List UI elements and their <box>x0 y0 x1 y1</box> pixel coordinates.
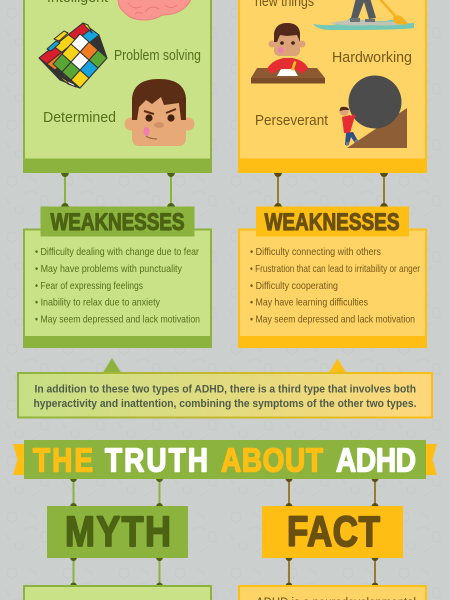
icon: boy at desk <box>251 23 325 84</box>
label: Perseverant: Perseverant <box>255 113 328 129</box>
arrow: right pointer <box>329 358 346 372</box>
heading: myth <box>47 506 188 558</box>
heading: weaknesses left: WEAKNESSES <box>50 209 184 235</box>
list: right weaknesses: • May have learning difficulties <box>250 298 368 308</box>
heading: weaknesses right: WEAKNESSES <box>264 209 400 235</box>
banner: the truth about ADHD: ABOUT <box>221 441 323 479</box>
panel: left strengths <box>23 0 212 173</box>
callout: third type of ADHD <box>18 373 432 418</box>
connectors: banner to myth and fact <box>70 479 378 586</box>
label: Problem solving: Problem solving <box>114 48 201 64</box>
banner: the truth about ADHD: THE <box>33 441 93 479</box>
list: left weaknesses <box>35 247 200 326</box>
list: left weaknesses: • May have problems with punctuality <box>35 264 183 275</box>
callout: third type of ADHD: hyperactivity and inattention, combining the symptoms of the other two types. <box>34 398 416 410</box>
heading: fact <box>262 506 403 558</box>
list: right weaknesses: • Difficulty connecting with others <box>250 247 381 258</box>
panel: right weaknesses <box>238 206 427 348</box>
heading: fact: FACT <box>287 509 380 556</box>
list: right weaknesses: • Difficulty cooperating <box>250 281 338 292</box>
banner: the truth about ADHD: ADHD <box>336 441 416 479</box>
connectors: strengths to weaknesses <box>61 173 388 207</box>
icon: paddle boarder <box>313 0 414 30</box>
icon: man pushing boulder <box>339 76 407 148</box>
list: left weaknesses: • May seem depressed and lack motivation <box>35 314 200 326</box>
icon: rubik's cube <box>39 23 107 88</box>
panel: fact text <box>239 586 426 600</box>
list: right weaknesses <box>250 247 420 326</box>
list: left weaknesses: • Inability to relax due to anxiety <box>35 298 161 308</box>
list: left weaknesses: • Difficulty dealing with change due to fear <box>35 247 199 258</box>
panel: myth text <box>24 586 211 600</box>
banner: the truth about ADHD <box>13 440 437 479</box>
list: right weaknesses: • May seem depressed and lack motivation <box>250 314 415 326</box>
heading: myth: MYTH <box>65 508 171 556</box>
panel: right strengths <box>238 0 427 173</box>
icon: boy face <box>124 79 194 146</box>
banner: the truth about ADHD: TRUTH <box>105 441 208 479</box>
panel: left weaknesses <box>23 206 212 348</box>
label: Determined: Determined <box>43 110 116 126</box>
callout: third type of ADHD: In addition to these two types of ADHD, there is a third type that involves both <box>34 384 416 396</box>
icon: brain <box>118 0 191 20</box>
label: Hardworking: Hardworking <box>332 50 412 66</box>
arrow: left pointer <box>103 358 121 372</box>
list: left weaknesses: • Fear of expressing feelings <box>35 281 143 292</box>
